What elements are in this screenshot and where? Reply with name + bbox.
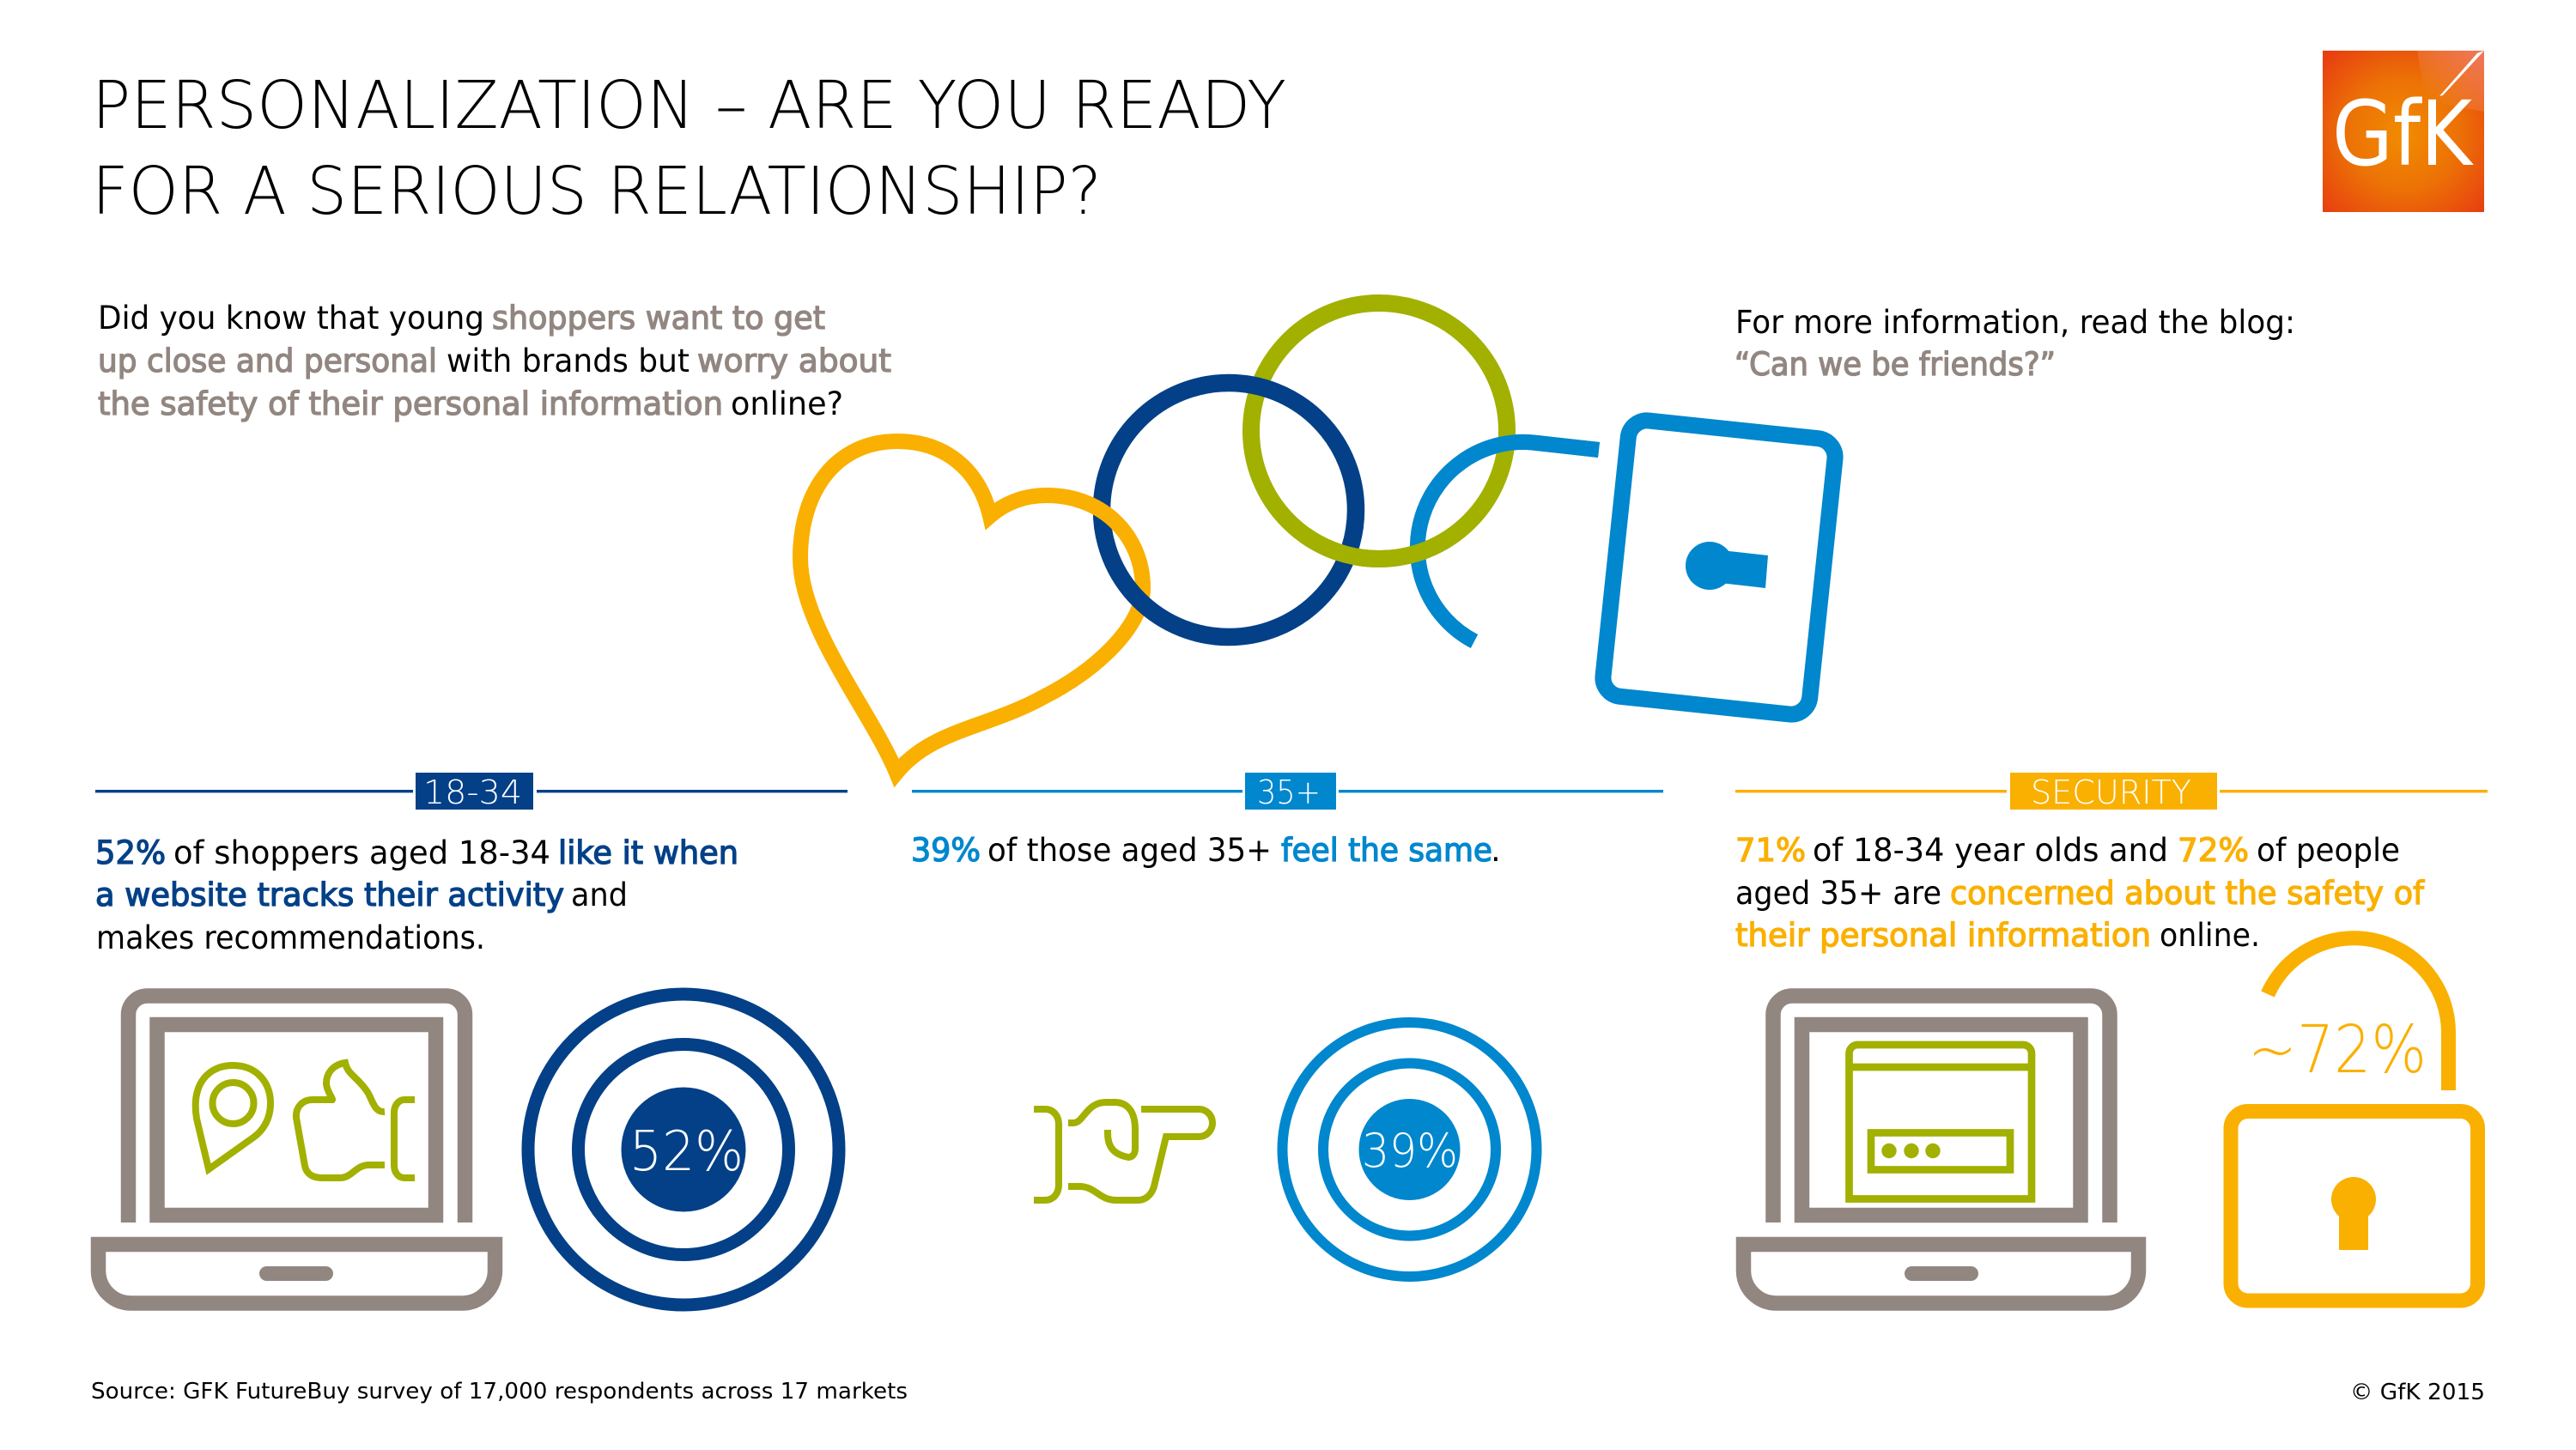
copyright: © GfK 2015 [2350, 1380, 2485, 1405]
text block: 18-34 finding: makes recommendations. [96, 919, 485, 956]
GfK logo: GfK [2332, 82, 2474, 186]
laptop base [98, 1245, 495, 1303]
text block: 18-34 finding [95, 834, 738, 956]
text block: security finding: of 18-34 year olds and [1813, 832, 2168, 869]
section header: 18-34 [95, 773, 848, 811]
chart: 52% target: 52% [629, 1120, 744, 1184]
source note: Source: GFK FutureBuy survey of 17,000 respondents across 17 markets [91, 1379, 908, 1404]
section header: 35+: 35+ [1257, 774, 1321, 811]
text block: 35+ finding: of those aged 35+ [987, 832, 1272, 869]
text block: 35+ finding: 39% [911, 832, 981, 869]
icon: browser window with password field [1850, 1045, 2032, 1198]
intro text: shoppers want to get [492, 300, 825, 337]
chart: 52% target [528, 994, 839, 1305]
laptop lid [1773, 996, 2110, 1222]
text block: 35+ finding [911, 832, 1501, 869]
blog reference text: For more information, read the blog: [1735, 304, 2295, 341]
icon: navy ring [1102, 383, 1356, 637]
chart: 39% target: 39% [1362, 1124, 1458, 1178]
text block: security finding [1735, 832, 2425, 954]
text block: security finding: aged 35+ are [1735, 875, 1941, 912]
laptop screen [1801, 1025, 2081, 1216]
trackpad [1905, 1266, 1978, 1281]
icon: open padlock with 72% [2231, 938, 2478, 1301]
chart: 39% target [1283, 1022, 1537, 1277]
text block: 18-34 finding: 52% [95, 834, 166, 871]
text block: 18-34 finding: a website tracks their activity [95, 877, 564, 913]
title: PERSONALIZATION – ARE YOU READY [92, 68, 1286, 144]
section header: 35+ [912, 773, 1663, 811]
laptop lid [129, 996, 465, 1222]
text block: security finding: 71% [1735, 832, 1806, 869]
laptop screen [157, 1025, 436, 1216]
icon: location pin [196, 1065, 270, 1169]
text block: 18-34 finding: like it when [558, 834, 738, 871]
icon: key shackle hook [1418, 442, 1599, 641]
title [92, 68, 1286, 230]
trackpad [259, 1266, 333, 1281]
blog reference text [1735, 304, 2295, 383]
icon: heart outline [800, 441, 1143, 773]
central illustration: interlocked heart, rings and key [800, 303, 1599, 773]
intro text: online? [731, 385, 843, 422]
text block: security finding: 72% [2178, 832, 2249, 869]
intro text: with brands but [447, 343, 690, 379]
icon: laptop with login window [1743, 996, 2138, 1303]
text block: security finding: of people [2257, 832, 2400, 869]
intro text [98, 300, 891, 422]
text block: security finding: their personal information [1735, 917, 2151, 954]
icon: open padlock with 72%: ~72% [2248, 1012, 2427, 1089]
section header: security [1735, 773, 2488, 811]
icon: tablet with keyhole [1601, 419, 1837, 716]
icon: green ring [1251, 303, 1507, 559]
section header: 18-34: 18-34 [423, 774, 522, 811]
icon: laptop with location pin and thumbs up [98, 996, 495, 1303]
intro text: worry about [697, 343, 891, 379]
text block: security finding: online. [2160, 917, 2260, 954]
intro text: Did you know that young [98, 300, 484, 337]
text block: 18-34 finding: of shoppers aged 18-34 [173, 834, 550, 871]
GfK logo [2323, 51, 2484, 212]
text block: 35+ finding: feel the same [1281, 832, 1492, 869]
intro text: up close and personal [98, 343, 437, 379]
text block: 18-34 finding: and [571, 877, 628, 913]
section header: security: SECURITY [2031, 774, 2191, 811]
icon: thumbs up [296, 1063, 415, 1178]
text block: security finding: concerned about the safety of [1950, 875, 2425, 912]
blog reference text: “Can we be friends?” [1735, 346, 2056, 383]
icon: pointing hand [1034, 1102, 1212, 1200]
text block: 35+ finding: . [1491, 832, 1501, 869]
title: FOR A SERIOUS RELATIONSHIP? [92, 154, 1102, 230]
intro text: the safety of their personal information [98, 385, 723, 422]
laptop base [1743, 1245, 2138, 1303]
